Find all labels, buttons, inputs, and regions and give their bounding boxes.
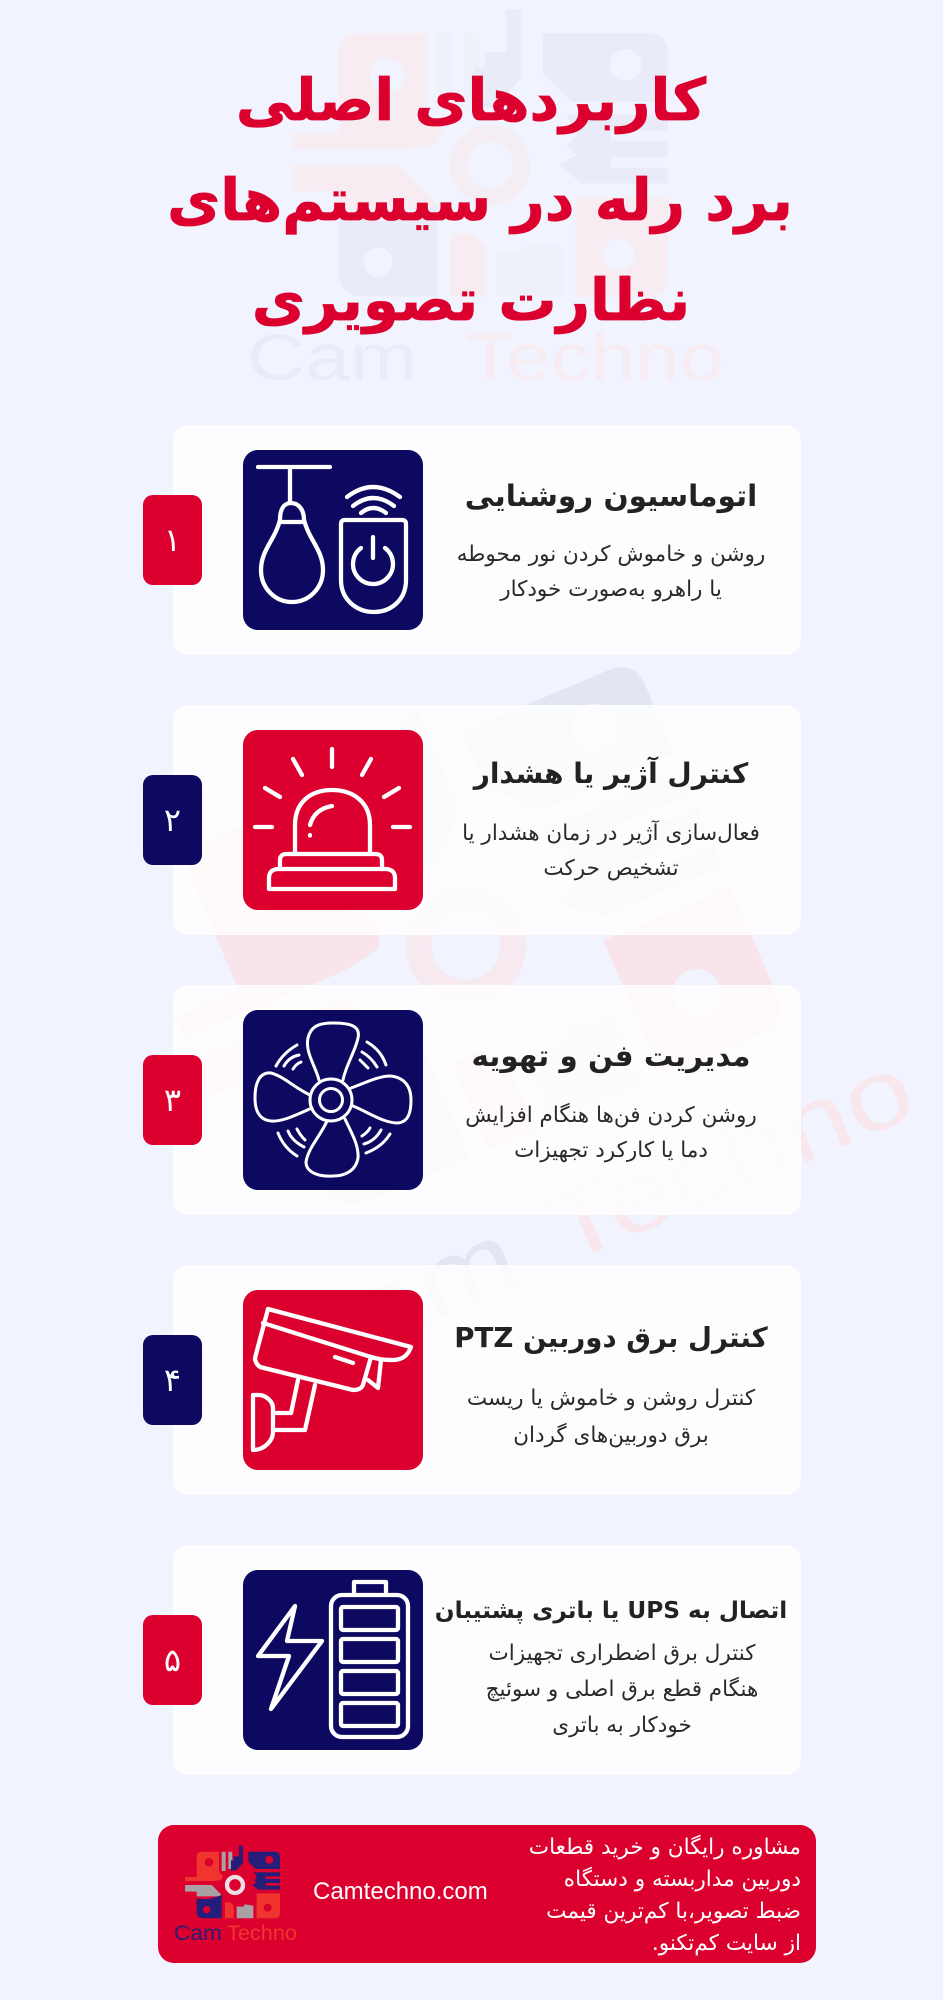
heading: اتوماسیون روشنایی	[465, 479, 757, 513]
footer text: مشاوره رایگان و خرید قطعات	[529, 1835, 801, 1860]
panel: item 5 UPS battery	[143, 1545, 801, 1775]
number badge 4: ۴	[164, 1361, 181, 1399]
card background	[173, 1545, 801, 1775]
footer logo: Techno	[227, 1922, 297, 1945]
website address: Camtechno.com	[313, 1878, 488, 1905]
card background	[173, 985, 801, 1215]
description: دما یا کارکرد تجهیزات	[514, 1138, 708, 1163]
footer text: از سایت کم‌تکنو.	[652, 1931, 801, 1956]
number badge 4	[143, 1335, 202, 1425]
footer logo	[174, 1846, 297, 1945]
number badge 2	[143, 775, 202, 865]
description: تشخیص حرکت	[543, 856, 679, 881]
footer callout	[158, 1825, 816, 1963]
number badge 5	[143, 1615, 202, 1705]
card background	[173, 425, 801, 655]
description: روشن کردن فن‌ها هنگام افزایش	[465, 1103, 757, 1128]
icon: fan	[243, 1010, 423, 1190]
watermark: upper logo: Cam	[247, 320, 417, 394]
description	[457, 542, 765, 602]
watermark: upper logo	[247, 10, 724, 394]
description: کنترل برق اضطراری تجهیزات	[488, 1641, 755, 1666]
title: برد رله در سیستم‌های	[167, 166, 793, 234]
icon: siren	[243, 730, 423, 910]
number badge 1: ۱	[164, 521, 181, 559]
number badge 3	[143, 1055, 202, 1145]
description	[486, 1641, 758, 1738]
heading: کنترل برق دوربین PTZ	[454, 1321, 768, 1354]
heading: مدیریت فن و تهویه	[471, 1039, 751, 1073]
description	[462, 820, 760, 881]
footer logo: Cam	[174, 1922, 222, 1945]
footer text	[529, 1834, 801, 1956]
watermark: large rotated logo: Cam	[254, 1199, 533, 1401]
description: هنگام قطع برق اصلی و سوئیچ	[486, 1677, 758, 1702]
title	[167, 66, 793, 335]
number badge 5: ۵	[164, 1641, 181, 1679]
number badge 1	[143, 495, 202, 585]
icon: bulb and remote	[243, 450, 423, 630]
title: کاربردهای اصلی	[236, 66, 706, 134]
panel: item 3 fan management	[143, 985, 801, 1215]
description	[465, 1102, 757, 1163]
icon: security camera	[243, 1290, 423, 1470]
description: یا راهرو به‌صورت خودکار	[500, 577, 722, 602]
watermark: upper logo: Techno	[466, 320, 724, 394]
watermark: large rotated logo: Techno	[529, 1031, 929, 1284]
description: فعال‌سازی آژیر در زمان هشدار یا	[462, 821, 760, 846]
card background	[173, 705, 801, 935]
footer text: دوربین مداربسته و دستگاه	[564, 1867, 801, 1892]
footer text: ضبط تصویر،با کم‌ترین قیمت	[546, 1899, 801, 1924]
number badge 3: ۳	[164, 1081, 181, 1119]
description	[467, 1386, 756, 1448]
heading: کنترل آژیر یا هشدار	[474, 757, 748, 790]
watermark: large rotated logo	[68, 593, 929, 1401]
panel: item 2 siren control	[143, 705, 801, 935]
card background	[173, 1265, 801, 1495]
description: روشن و خاموش کردن نور محوطه	[457, 542, 765, 567]
number badge 2: ۲	[164, 801, 181, 839]
description: برق دوربین‌های گردان	[513, 1423, 709, 1448]
title: نظارت تصویری	[252, 266, 690, 334]
description: خودکار به باتری	[552, 1713, 692, 1738]
panel: item 1 lighting automation	[143, 425, 801, 655]
description: کنترل روشن و خاموش یا ریست	[467, 1386, 755, 1411]
icon: battery and bolt	[243, 1570, 423, 1750]
heading: اتصال به UPS یا باتری پشتیبان	[435, 1597, 787, 1624]
panel: item 4 PTZ power	[143, 1265, 801, 1495]
